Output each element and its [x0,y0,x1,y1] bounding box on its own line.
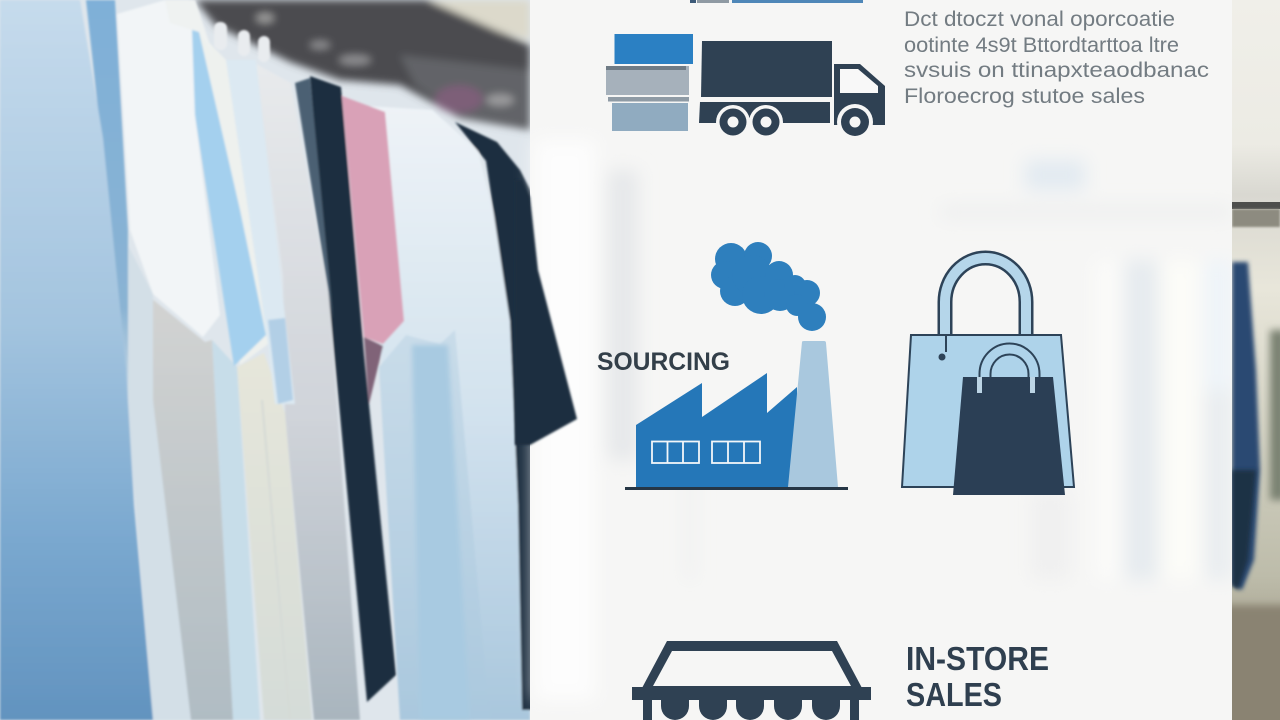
icon: top fragment [690,0,863,3]
shirt: under grey [151,298,233,720]
wrinkled strip [120,230,191,720]
shirt: sleeve pale [226,60,295,404]
shirt: inner blue [379,330,490,720]
shirt: pink [342,96,404,344]
text block: description: ootinte 4s9t Bttordtarttoa ltre [904,34,1179,57]
big garment [0,0,153,720]
shirt: cream [237,353,312,720]
shirt: navy [310,76,396,702]
icon: stacked boxes [606,34,693,131]
icon: truck [699,41,885,140]
icon: smoke cloud [711,242,826,331]
shirt: light blue sleeve [170,23,266,366]
text block: description [904,8,1209,108]
shirt: white front [117,0,220,337]
shirt: narrow blue [212,340,260,720]
icon: shopping bags [902,258,1074,495]
hangers [214,22,270,62]
text block: description: Floroecrog stutoe sales [904,85,1145,108]
icon: storefront [632,641,871,720]
shirt: black [455,122,534,710]
shirt: grey [256,64,360,720]
shirt: white strip [199,32,268,365]
heading: in-store sales: IN-STORE [906,640,1049,677]
garment: black sleeve over panel [515,180,577,445]
panel: blurred background [530,0,1232,720]
heading: in-store sales: SALES [906,676,1002,713]
photo: clothing rack [0,0,534,720]
garments back to front [0,0,534,720]
fold [86,0,128,440]
icon: factory [625,341,848,490]
photo: right strip [1232,0,1280,720]
text block: description: svsuis on ttinapxteaodbanac [904,59,1209,82]
rack shadow [195,0,530,130]
heading: sourcing: SOURCING [597,348,730,376]
text block: description: Dct dtoczt vonal oporcoatie [904,8,1175,31]
shirt: pale big [367,106,530,720]
heading: in-store sales [906,640,1049,713]
